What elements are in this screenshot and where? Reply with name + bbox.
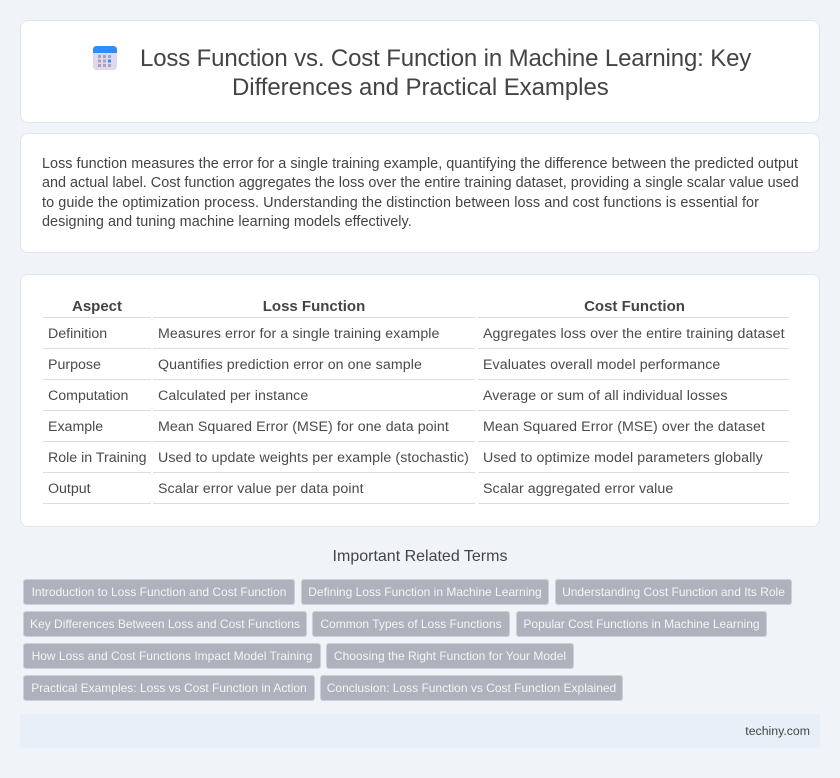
row: definition: Definition (48, 326, 107, 342)
related term tags: Common Types of Loss Functions (320, 617, 502, 631)
title (140, 45, 752, 101)
row: purpose: Purpose (48, 357, 101, 373)
row: output: Scalar aggregated error value (483, 481, 673, 497)
related term tags: Practical Examples: Loss vs Cost Function in Action (31, 681, 307, 695)
related term tags: Introduction to Loss Function and Cost Function (32, 585, 286, 599)
row: purpose (48, 357, 720, 373)
footer bar (20, 714, 820, 748)
row: role in training: Role in Training (48, 450, 147, 466)
related terms heading: Important Related Terms (333, 548, 507, 565)
related term tags: Popular Cost Functions in Machine Learning (523, 617, 760, 631)
description text: to guide the optimization process. Understanding the distinction between loss and cost functions is essential for (42, 195, 759, 211)
row: definition: Aggregates loss over the entire training dataset (483, 326, 785, 342)
title: Differences and Practical Examples (232, 74, 609, 101)
row: output: Output (48, 481, 91, 497)
description text: designing and tuning machine learning models effectively. (42, 214, 412, 230)
row: role in training: Used to update weights per example (stochastic) (158, 450, 469, 466)
row: computation (48, 388, 728, 404)
row: purpose: Quantifies prediction error on one sample (158, 357, 422, 373)
row: purpose: Evaluates overall model performance (483, 357, 720, 373)
icon: calendar grid (93, 46, 117, 70)
title: Loss Function vs. Cost Function in Machine Learning: Key (140, 45, 751, 72)
description text: and actual label. Cost function aggregates the loss over the entire training dataset, providing a single scalar value used (42, 175, 799, 191)
comparison table card (20, 274, 820, 527)
description text: Loss function measures the error for a single training example, quantifying the difference between the predicted output (42, 156, 798, 172)
row: computation: Average or sum of all individual losses (483, 388, 728, 404)
row: definition: Measures error for a single training example (158, 326, 440, 342)
table header: Cost Function (584, 298, 685, 315)
related term tags: Key Differences Between Loss and Cost Functions (30, 617, 300, 631)
table header (72, 298, 685, 315)
table header: Aspect (72, 298, 122, 315)
row: example (48, 419, 765, 435)
row: computation: Computation (48, 388, 128, 404)
table header: Loss Function (263, 298, 365, 315)
related term tags: Choosing the Right Function for Your Model (334, 649, 566, 663)
row: example: Mean Squared Error (MSE) for one data point (158, 419, 449, 435)
row: role in training: Used to optimize model parameters globally (483, 450, 763, 466)
related term tags: Conclusion: Loss Function vs Cost Function Explained (327, 681, 616, 695)
row: example: Example (48, 419, 103, 435)
row: output (48, 481, 673, 497)
description card (20, 133, 820, 253)
row: definition (48, 326, 785, 342)
footer site name: techiny.com (745, 724, 810, 738)
related term tags: Understanding Cost Function and Its Role (562, 585, 785, 599)
row: computation: Calculated per instance (158, 388, 308, 404)
row: example: Mean Squared Error (MSE) over the dataset (483, 419, 765, 435)
related term tags (23, 579, 792, 701)
related term tags: How Loss and Cost Functions Impact Model Training (32, 649, 312, 663)
related term tags: Defining Loss Function in Machine Learning (308, 585, 542, 599)
row: role in training (48, 450, 763, 466)
description text (42, 156, 799, 230)
header card (20, 20, 820, 123)
row: output: Scalar error value per data point (158, 481, 364, 497)
